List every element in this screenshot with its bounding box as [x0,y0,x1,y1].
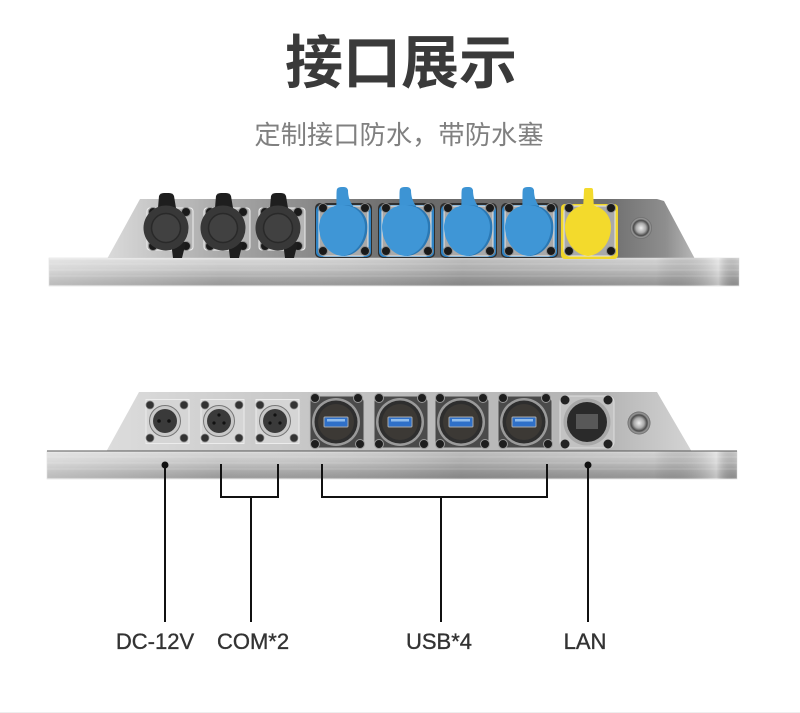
icon: blue connector caps [315,187,558,258]
callout: USB*4 [322,464,547,654]
icon: LAN connector [560,396,614,448]
icon: yellow connector cap [561,188,618,259]
icon: USB connectors [310,394,552,448]
callout: COM*2: COM*2 [217,629,289,654]
metal bar [47,451,737,479]
callout: DC-12V: DC-12V [116,629,194,654]
callout: USB*4: USB*4 [406,629,472,654]
back plate [107,199,695,259]
callout: LAN [564,462,606,654]
icon: power button [630,217,652,239]
icon: black connector caps [144,193,305,258]
callout: COM*2 [217,464,289,654]
title: 接口展示 [285,31,517,96]
icon: COM connectors [201,400,299,444]
metal bar [49,258,739,286]
back plate [106,392,692,452]
icon: DC connector [146,400,189,444]
icon: power button [628,412,650,434]
panel: exposed interface view [47,392,737,479]
panel: waterproof capped interface view [49,187,739,286]
callout: DC-12V [116,462,194,654]
callout: LAN: LAN [564,629,606,654]
subtitle: 定制接口防水，带防水塞 [254,120,544,150]
